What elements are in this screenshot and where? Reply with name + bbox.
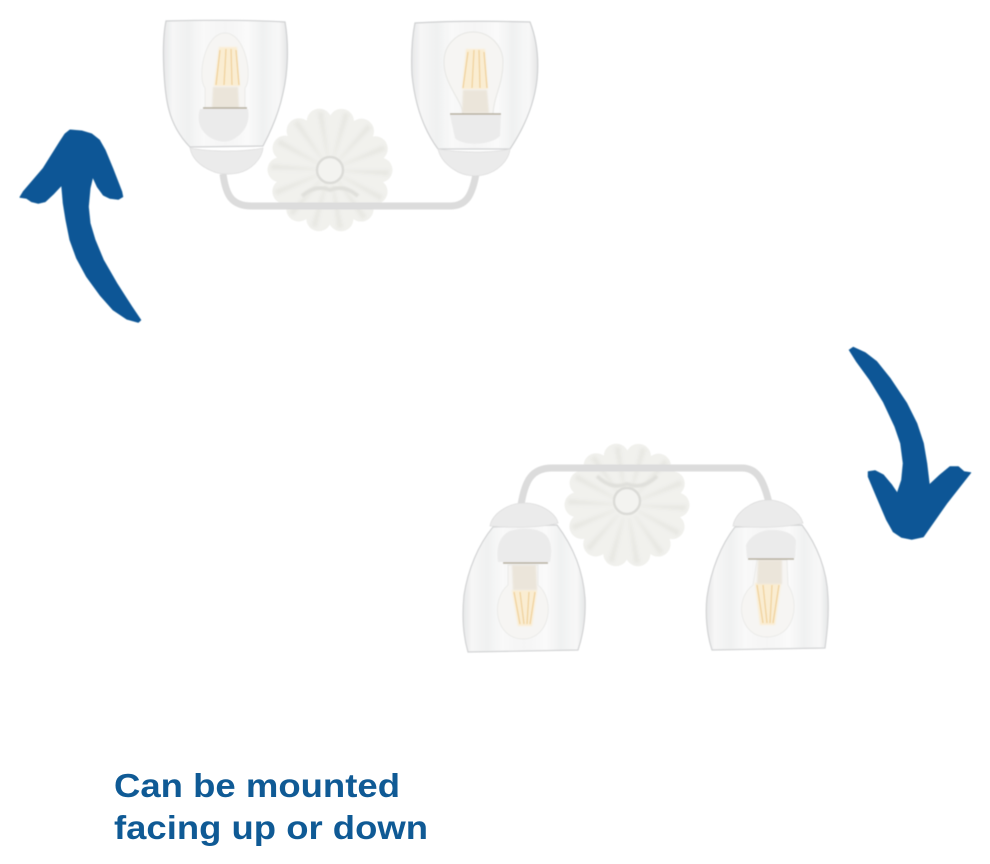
caption: facing up or down	[114, 809, 428, 846]
left bulb	[202, 33, 248, 108]
left socket	[497, 529, 551, 562]
arm	[223, 174, 476, 206]
right socket	[746, 530, 796, 558]
left socket	[199, 109, 249, 142]
right collar	[438, 149, 510, 176]
arrow: curved down	[849, 347, 971, 539]
right bulb	[742, 560, 794, 637]
back plate	[280, 120, 380, 220]
arm	[521, 468, 769, 505]
right shade	[412, 21, 538, 149]
right bulb	[444, 32, 503, 114]
left filament	[214, 47, 240, 86]
caption	[114, 767, 428, 846]
left shade	[163, 20, 287, 147]
right filament	[755, 583, 781, 625]
lamp: mounted facing down	[463, 455, 828, 652]
left bulb	[497, 565, 548, 639]
right socket	[450, 115, 501, 144]
right filament	[462, 49, 488, 89]
left filament	[512, 590, 537, 626]
left shade	[463, 525, 585, 652]
right collar	[733, 500, 803, 527]
arrow: curved up	[20, 130, 141, 322]
left collar	[190, 148, 263, 174]
right shade	[706, 525, 828, 650]
left collar	[490, 503, 558, 527]
back plate	[577, 455, 677, 555]
caption: Can be mounted	[114, 767, 400, 804]
lamp: mounted facing up	[163, 20, 538, 220]
